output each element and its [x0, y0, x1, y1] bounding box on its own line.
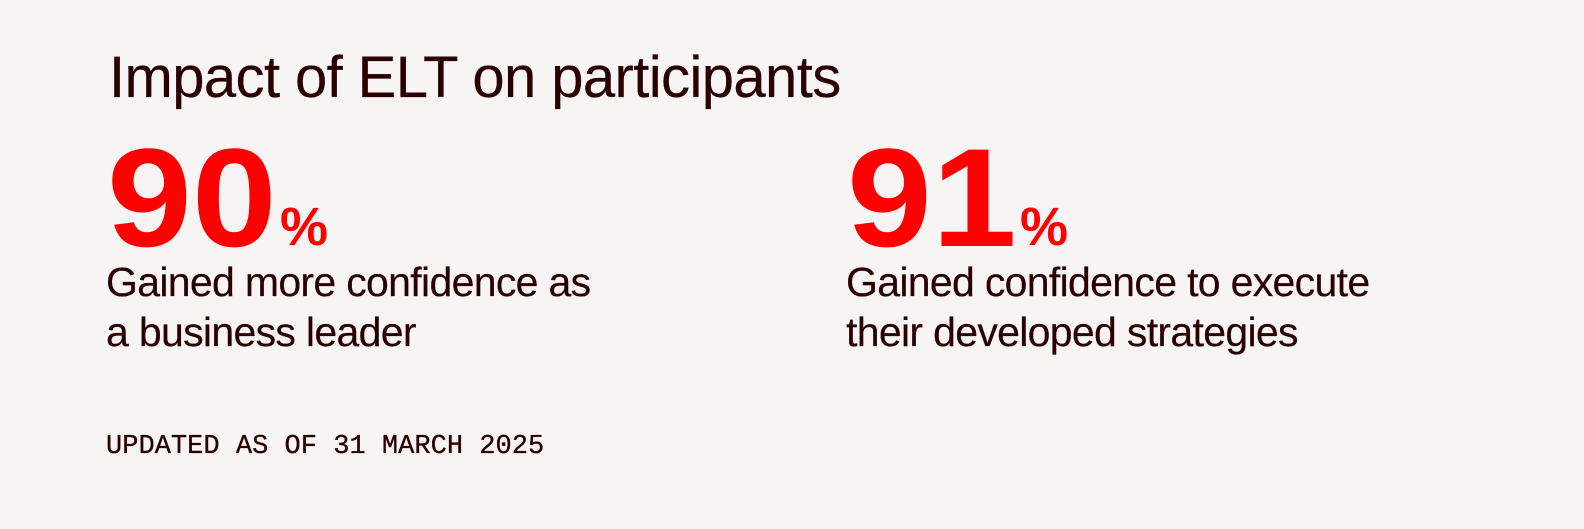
percent sign: %	[280, 197, 328, 257]
number 91: 91	[847, 119, 1017, 276]
number 90: 90	[107, 119, 277, 276]
title: Impact of ELT on participants	[109, 45, 841, 110]
description: Gained more confidence as	[106, 259, 590, 305]
stat: 91 percent	[846, 119, 1369, 355]
description: their developed strategies	[846, 309, 1298, 355]
description	[846, 259, 1369, 355]
description	[106, 259, 590, 355]
description: Gained confidence to execute	[846, 259, 1369, 305]
description: a business leader	[106, 309, 416, 355]
stat: 90 percent	[106, 119, 590, 355]
percent sign: %	[1020, 197, 1068, 257]
footnote: update date: UPDATED AS OF 31 MARCH 2025	[106, 431, 544, 462]
